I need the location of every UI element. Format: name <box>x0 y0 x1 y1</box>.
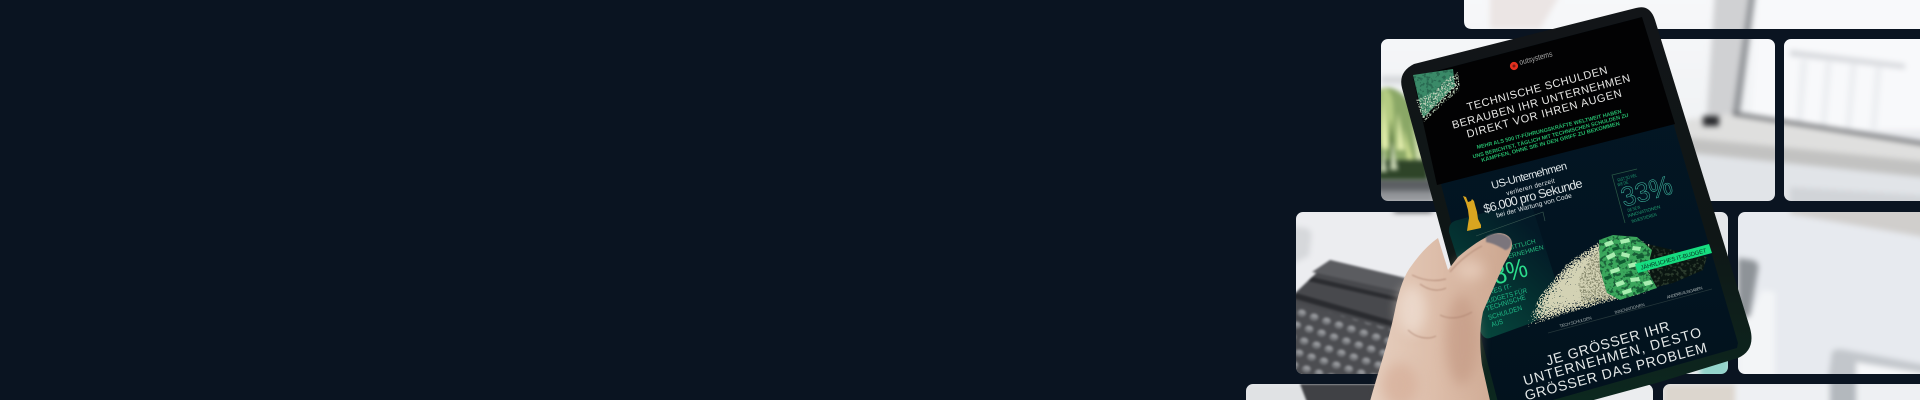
stat: 28 percent: BUDGETS FÜR <box>1483 287 1528 306</box>
teal panel <box>1449 200 1562 338</box>
stat: 33 percent: DIE SIE IN <box>1627 205 1641 213</box>
green intro text: MEHR ALS 500 IT-FÜHRUNGSKRÄFTE WELTWEIT HABEN <box>1476 108 1622 151</box>
beige speckled segment <box>1525 238 1650 328</box>
stat: 28 percent: DURCHSCHNITTLICH <box>1472 238 1537 262</box>
hand tone variation <box>1382 260 1484 400</box>
US companies statement: US-Unternehmen <box>1490 160 1568 192</box>
US companies statement <box>1482 160 1584 220</box>
US companies statement: $6.000 pro Sekunde <box>1482 176 1584 216</box>
dark pile segment <box>1643 243 1707 288</box>
green intro text: UNS BERICHTET, TÄGLICH MIT TECHNISCHEN SCHULDEN ZU <box>1472 112 1629 160</box>
hand silhouette <box>1369 233 1512 400</box>
category labels: ANDERE AUSGABEN <box>1666 285 1703 300</box>
stat: 28 percent: AUS <box>1491 319 1504 329</box>
green intro text: KÄMPFEN, OHNE SIE IN DEN GRIFF ZU BEKOMMEN <box>1481 120 1621 164</box>
stat: 28 percent: SCHULDEN <box>1488 305 1523 322</box>
stat: 28 percent <box>1471 238 1545 329</box>
tablet device <box>1401 7 1752 400</box>
green money fragment top-left <box>1413 69 1460 122</box>
category labels: TECH SCHULDEN <box>1559 315 1592 329</box>
category labels <box>1559 285 1703 329</box>
stat: 28 percent: TECHNISCHE <box>1486 294 1527 313</box>
title: DIREKT VOR IHREN AUGEN <box>1465 88 1623 141</box>
outline bracket <box>1476 212 1545 236</box>
bottom headline: UNTERNEHMEN, DESTO <box>1521 324 1703 388</box>
green banknote segment <box>1599 235 1657 300</box>
stat: 33 percent: WIE DIE <box>1617 180 1629 187</box>
tablet bezel <box>1401 7 1752 400</box>
category labels: INNOVATIONEN <box>1614 302 1645 315</box>
keyboard in photo <box>1285 260 1405 400</box>
stat: 28 percent: GEBEN UNTERNEHMEN <box>1471 244 1545 270</box>
pile category axis <box>1548 289 1712 333</box>
title: BERAUBEN IHR UNTERNEHMEN <box>1451 72 1632 132</box>
potted plant in photo <box>1376 88 1428 180</box>
icon: statue of liberty <box>1463 196 1481 231</box>
bottom headline: JE GRÖSSER IHR <box>1544 317 1671 369</box>
tablet screen background <box>1413 17 1738 400</box>
palm creases <box>1408 246 1482 338</box>
black header section <box>1413 17 1675 185</box>
stat: 33 percent: 33% <box>1618 170 1676 213</box>
stat: 28 percent: 28% <box>1477 253 1531 294</box>
title: TECHNISCHE SCHULDEN <box>1466 65 1609 114</box>
US companies statement: bei der Wartung von Code <box>1496 192 1573 220</box>
US companies statement: verlieren derzeit <box>1506 178 1556 197</box>
stat: 33 percent: FAST SO VIEL <box>1617 173 1638 183</box>
stat: 33 percent <box>1612 169 1676 224</box>
logo: outsystems: outsystems <box>1518 49 1553 67</box>
stat: 33 percent: INVESTIEREN <box>1631 212 1657 224</box>
stat: 33 percent: INNOVATIONEN <box>1627 204 1661 218</box>
photo tiles: blurred desk scene <box>1240 0 1920 400</box>
logo: outsystems <box>1511 49 1553 69</box>
money pile chart <box>1525 235 1712 333</box>
stat: 28 percent: IHRES IT- <box>1482 283 1513 298</box>
hand holding tablet <box>1369 233 1512 400</box>
thumbnail <box>1486 234 1511 250</box>
hero composition: photo mosaic and tablet <box>1246 0 1920 400</box>
label: annual IT budget: JÄHRLICHES IT-BUDGET <box>1640 247 1708 272</box>
